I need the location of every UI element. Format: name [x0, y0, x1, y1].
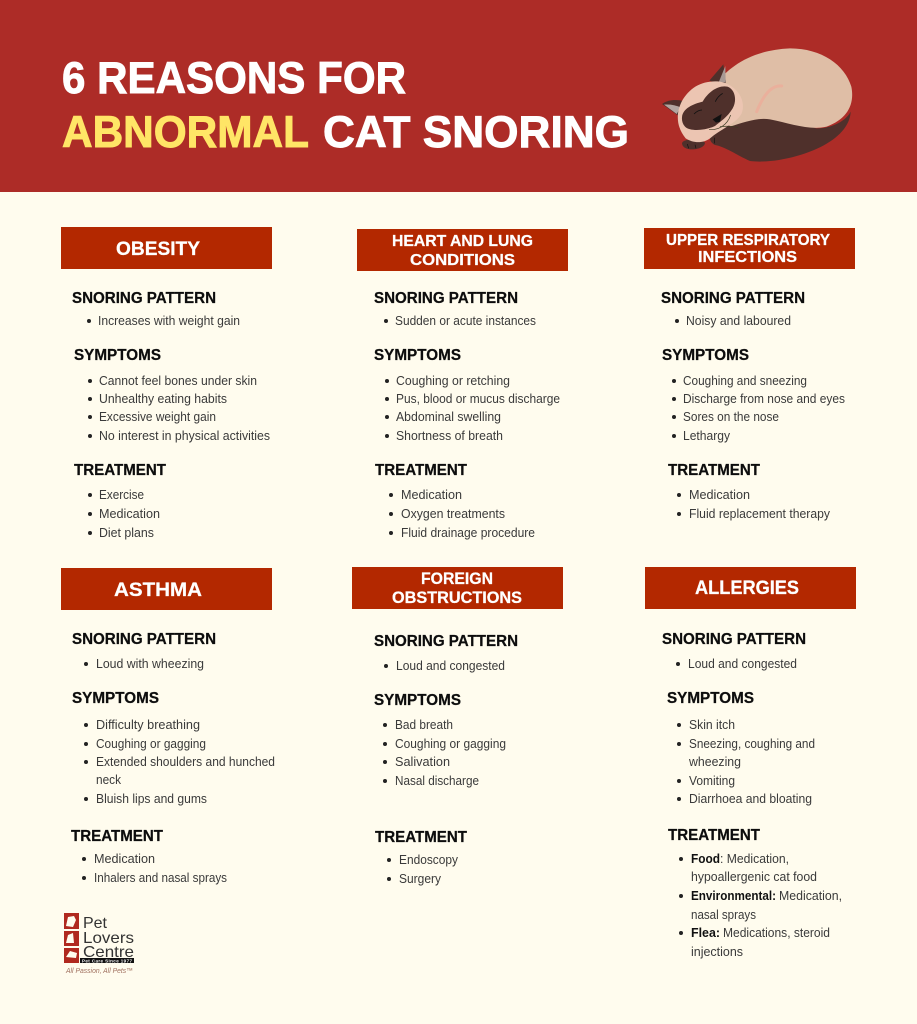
- symptoms: Coughing and sneezing: [683, 374, 807, 388]
- snoring pattern: [662, 631, 806, 671]
- symptoms: Cannot feel bones under skin: [99, 374, 257, 388]
- snoring pattern: [374, 633, 518, 673]
- symptoms: SYMPTOMS: [74, 347, 161, 364]
- symptoms: neck: [96, 773, 122, 787]
- treatment: Exercise: [99, 488, 144, 502]
- symptoms: Extended shoulders and hunched: [96, 755, 275, 769]
- treatment: Medication: [94, 852, 155, 866]
- symptoms: Vomiting: [689, 774, 735, 788]
- snoring pattern: [661, 290, 805, 328]
- symptoms: Excessive weight gain: [99, 410, 216, 424]
- symptoms: wheezing: [688, 755, 741, 769]
- symptoms: Bluish lips and gums: [96, 792, 207, 806]
- symptoms: Lethargy: [683, 429, 731, 443]
- treatment: Environmental:: [691, 889, 776, 903]
- treatment: TREATMENT: [71, 828, 164, 845]
- snoring pattern: [72, 290, 240, 328]
- heading: upper respiratory infections: [644, 228, 855, 269]
- treatment: [668, 462, 831, 521]
- panel: upper respiratory infections: [644, 228, 855, 521]
- heading: asthma: [61, 568, 272, 610]
- symptoms: SYMPTOMS: [662, 347, 749, 364]
- treatment: Oxygen treatments: [401, 507, 505, 521]
- logo: Pet Lovers Centre: Centre: [83, 944, 134, 961]
- symptoms: No interest in physical activities: [99, 429, 270, 443]
- title: [62, 54, 629, 157]
- symptoms: Unhealthy eating habits: [99, 392, 227, 406]
- heading: heart and lung conditions: [357, 229, 568, 271]
- symptoms: [374, 692, 506, 788]
- treatment: : Medication,: [720, 852, 789, 866]
- symptoms: Difficulty breathing: [96, 718, 200, 732]
- treatment: [375, 462, 535, 540]
- panel: heart and lung conditions: [357, 229, 568, 540]
- panel: foreign obstructions: [352, 567, 563, 886]
- snoring pattern: Noisy and laboured: [686, 314, 791, 328]
- treatment: Inhalers and nasal sprays: [94, 871, 227, 885]
- treatment: Endoscopy: [399, 853, 459, 867]
- treatment: Medication: [99, 507, 160, 521]
- symptoms: SYMPTOMS: [374, 692, 461, 709]
- treatment: Fluid drainage procedure: [401, 526, 535, 540]
- symptoms: Coughing or gagging: [96, 737, 206, 751]
- heading: foreign obstructions: [352, 567, 563, 609]
- icon: sleeping cat: [662, 48, 852, 162]
- symptoms: Discharge from nose and eyes: [683, 392, 845, 406]
- heading: heart and lung conditions: CONDITIONS: [410, 252, 515, 269]
- symptoms: [74, 347, 270, 443]
- symptoms: [374, 347, 560, 443]
- symptoms: Coughing or gagging: [395, 737, 506, 751]
- treatment: [71, 828, 227, 885]
- snoring pattern: SNORING PATTERN: [662, 631, 806, 648]
- heading: asthma: ASTHMA: [114, 579, 202, 601]
- snoring pattern: Loud and congested: [688, 657, 797, 671]
- title: ABNORMAL: [62, 108, 309, 157]
- title: CAT SNORING: [323, 108, 629, 157]
- treatment: Medication: [401, 488, 462, 502]
- heading: heart and lung conditions: HEART AND LUNG: [392, 233, 533, 250]
- treatment: nasal sprays: [691, 908, 756, 922]
- symptoms: [662, 347, 845, 443]
- treatment: [375, 829, 468, 886]
- heading: allergies: [645, 567, 856, 609]
- heading: obesity: OBESITY: [116, 238, 200, 260]
- symptoms: SYMPTOMS: [72, 690, 159, 707]
- treatment: TREATMENT: [74, 462, 167, 479]
- treatment: TREATMENT: [375, 462, 468, 479]
- snoring pattern: SNORING PATTERN: [374, 633, 518, 650]
- symptoms: Sneezing, coughing and: [689, 737, 815, 751]
- heading: allergies: ALLERGIES: [695, 577, 799, 599]
- snoring pattern: [72, 631, 216, 671]
- treatment: Fluid replacement therapy: [689, 507, 831, 521]
- heading: upper respiratory infections: INFECTIONS: [698, 249, 797, 266]
- panel: obesity: [61, 227, 272, 540]
- treatment: TREATMENT: [668, 462, 761, 479]
- logo: Pet Lovers Centre: All Passion, All Pets™: [65, 966, 133, 975]
- symptoms: [72, 690, 275, 806]
- symptoms: Salivation: [395, 755, 450, 769]
- snoring pattern: Increases with weight gain: [98, 314, 240, 328]
- treatment: hypoallergenic cat food: [691, 870, 817, 884]
- heading: obesity: [61, 227, 272, 269]
- symptoms: Sores on the nose: [683, 410, 779, 424]
- treatment: Food: [691, 852, 720, 866]
- panel: asthma: [61, 568, 275, 885]
- treatment: Diet plans: [99, 526, 154, 540]
- treatment: Medication,: [779, 889, 842, 903]
- snoring pattern: SNORING PATTERN: [661, 290, 805, 307]
- symptoms: SYMPTOMS: [667, 690, 754, 707]
- heading: foreign obstructions: FOREIGN: [421, 570, 493, 588]
- symptoms: Nasal discharge: [395, 774, 479, 788]
- symptoms: SYMPTOMS: [374, 347, 461, 364]
- symptoms: Bad breath: [395, 718, 453, 732]
- logo: Pet Lovers Centre: Pet: [83, 915, 108, 932]
- treatment: TREATMENT: [668, 827, 761, 844]
- symptoms: Abdominal swelling: [396, 410, 501, 424]
- treatment: Surgery: [399, 872, 442, 886]
- panel: allergies: [645, 567, 856, 959]
- treatment: [668, 827, 842, 959]
- snoring pattern: SNORING PATTERN: [374, 290, 518, 307]
- symptoms: Skin itch: [689, 718, 735, 732]
- treatment: TREATMENT: [375, 829, 468, 846]
- logo: Pet Lovers Centre: [64, 913, 134, 975]
- symptoms: Coughing or retching: [396, 374, 510, 388]
- treatment: Medications, steroid: [723, 926, 830, 940]
- heading: upper respiratory infections: UPPER RESPIRATORY: [666, 232, 830, 249]
- treatment: [74, 462, 167, 540]
- heading: foreign obstructions: OBSTRUCTIONS: [392, 589, 522, 607]
- snoring pattern: Loud and congested: [396, 659, 505, 673]
- symptoms: Shortness of breath: [396, 429, 503, 443]
- header banner: [0, 0, 917, 192]
- symptoms: Diarrhoea and bloating: [689, 792, 812, 806]
- logo: Pet Lovers Centre: Pet Care Since 1977: [82, 958, 132, 964]
- snoring pattern: SNORING PATTERN: [72, 290, 216, 307]
- logo: Pet Lovers Centre: Lovers: [83, 930, 134, 947]
- snoring pattern: [374, 290, 536, 328]
- treatment: injections: [691, 945, 743, 959]
- snoring pattern: Loud with wheezing: [96, 657, 204, 671]
- snoring pattern: Sudden or acute instances: [395, 314, 536, 328]
- treatment: Medication: [689, 488, 750, 502]
- snoring pattern: SNORING PATTERN: [72, 631, 216, 648]
- treatment: Flea:: [691, 926, 720, 940]
- symptoms: [667, 690, 815, 806]
- title: 6 REASONS FOR: [62, 54, 406, 103]
- symptoms: Pus, blood or mucus discharge: [396, 392, 560, 406]
